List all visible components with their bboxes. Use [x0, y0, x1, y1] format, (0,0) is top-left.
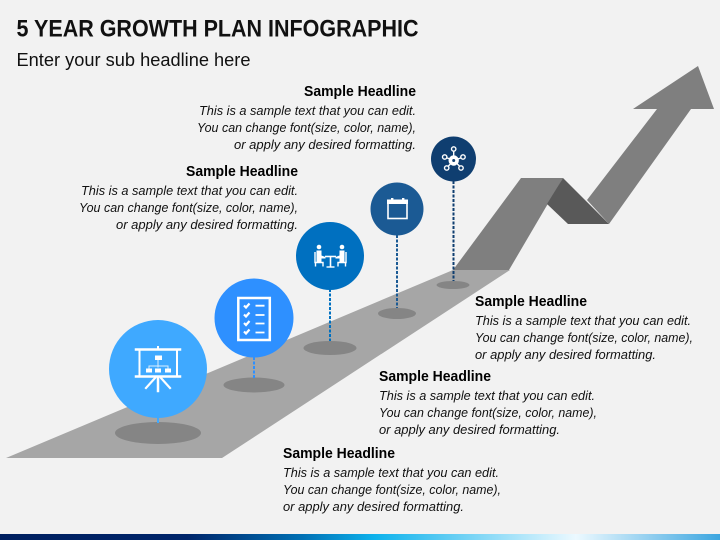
text block: bottom headline: This is a sample text that you can edit. — [283, 465, 499, 480]
text block: bottom headline — [283, 446, 501, 514]
text block: second headline: You can change font(size, color, name), — [79, 200, 298, 215]
title: 5 YEAR GROWTH PLAN INFOGRAPHIC — [16, 16, 418, 42]
icon: network — [442, 147, 465, 170]
road — [6, 270, 510, 458]
text block: middle headline: or apply any desired formatting. — [379, 422, 560, 437]
subtitle: Enter your sub headline here — [16, 50, 250, 70]
text block: top headline: You can change font(size, color, name), — [197, 120, 416, 135]
text block: right headline: This is a sample text that you can edit. — [475, 313, 691, 328]
text block: top headline: Sample Headline — [304, 84, 416, 100]
text block: bottom headline: You can change font(size, color, name), — [283, 482, 501, 497]
text block: bottom headline: Sample Headline — [283, 446, 395, 462]
text block: second headline: or apply any desired formatting. — [116, 217, 298, 232]
text block: second headline: This is a sample text that you can edit. — [81, 183, 298, 198]
text block: top headline: or apply any desired formatting. — [234, 137, 416, 152]
icon: presentation board — [136, 347, 180, 391]
bottom gradient bar — [0, 534, 720, 540]
text block: right headline: or apply any desired formatting. — [475, 347, 656, 362]
arrow head and upper ribbon — [587, 66, 714, 224]
text block: second headline — [79, 164, 298, 232]
text block: second headline: Sample Headline — [186, 164, 298, 180]
growth road and arrow — [6, 66, 714, 458]
arrow lower ribbon — [453, 178, 563, 270]
text block: right headline: Sample Headline — [475, 294, 587, 310]
text block: middle headline: You can change font(size, color, name), — [379, 405, 597, 420]
text block: right headline: You can change font(size, color, name), — [475, 330, 693, 345]
text block: middle headline — [379, 369, 597, 437]
step 5 marker — [431, 136, 476, 289]
icon: checklist — [238, 298, 270, 340]
text block: middle headline: This is a sample text that you can edit. — [379, 388, 595, 403]
step 4 marker — [370, 182, 424, 319]
text block: top headline: This is a sample text that you can edit. — [199, 103, 416, 118]
step 2 marker — [214, 278, 294, 392]
icon: calendar — [387, 198, 408, 218]
arrow fold — [547, 178, 609, 224]
text block: bottom headline: or apply any desired formatting. — [283, 499, 464, 514]
step 1 marker — [109, 320, 207, 444]
icon: meeting at table — [315, 245, 346, 267]
step 3 marker — [296, 222, 364, 355]
text block: top headline — [197, 84, 416, 152]
text block: middle headline: Sample Headline — [379, 369, 491, 385]
text block: right headline — [475, 294, 693, 362]
